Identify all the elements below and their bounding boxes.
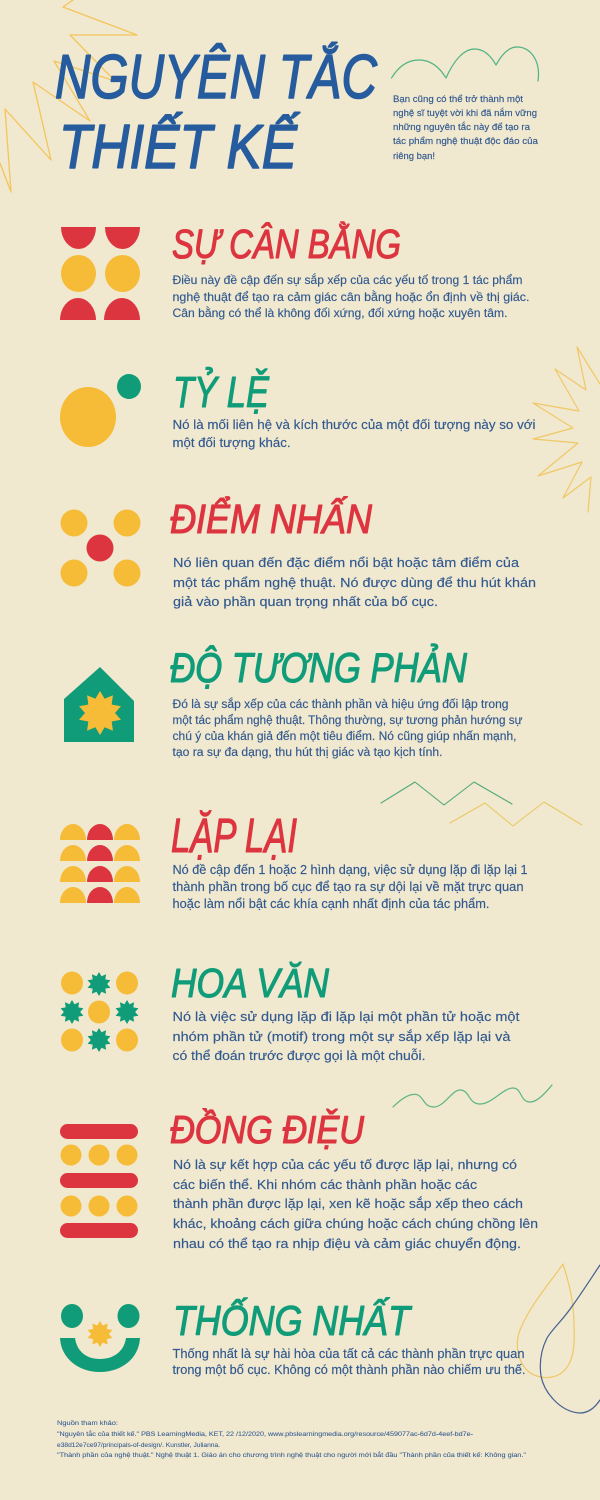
text: pattern: Nó là việc sử dụng lặp đi lặp lại một phần tử hoặc một <box>172 1009 520 1024</box>
text: contrast: Đó là sự sắp xếp của các thành phần và hiệu ứng đối lập trong <box>172 698 508 711</box>
text: pattern: nhóm phần tử (motif) trong một sự sắp xếp lặp lại và <box>172 1029 511 1044</box>
text: repetition <box>172 863 528 911</box>
icon: balance <box>60 227 140 320</box>
intro text: nghệ sĩ tuyệt vời khi đã nắm vững <box>393 108 537 119</box>
text: balance: nghệ thuật để tạo ra cảm giác cân bằng hoặc ổn định về thị giác. <box>172 289 530 304</box>
wave decoration: green <box>393 1085 552 1107</box>
text: unity: Thống nhất là sự hài hòa của tất cả các thành phần trực quan <box>172 1347 525 1361</box>
zigzag decoration: green and gold <box>381 782 582 826</box>
heading: emphasis: ĐIỂM NHẤN <box>170 495 372 542</box>
heading: repetition: LẶP LẠI <box>171 810 297 863</box>
references <box>57 1418 527 1459</box>
text: contrast: tạo ra sự đa dạng, thu hút thị giác và tạo kịch tính. <box>172 747 442 759</box>
panel: proportion <box>60 366 536 450</box>
text: emphasis: Nó liên quan đến đặc điểm nổi bật hoặc tâm điểm của <box>173 555 520 570</box>
arches decoration: green <box>392 47 538 81</box>
panel: repetition <box>60 810 528 911</box>
text: balance: Cân bằng có thể là không đối xứng, đối xứng hoặc xuyên tâm. <box>172 305 508 320</box>
icon: emphasis <box>60 510 140 586</box>
heading: unity: THỐNG NHẤT <box>173 1296 413 1344</box>
references: e38d12e7ce97/principals-of-design/. Kunstler, Julianna. <box>57 1442 220 1449</box>
intro text <box>393 94 539 162</box>
icon: repetition <box>60 824 140 903</box>
text: rhythm <box>173 1157 538 1251</box>
text: proportion: Nó là mối liên hệ và kích thước của một đối tượng này so với <box>172 417 536 432</box>
loop decoration: gold and navy <box>517 1264 600 1413</box>
text: rhythm: nhau có thể tạo ra nhịp điệu và cảm giác chuyển động. <box>173 1236 521 1251</box>
text: pattern <box>172 1009 520 1063</box>
icon: proportion <box>60 374 141 447</box>
panel: unity <box>60 1296 526 1377</box>
icon: unity smile <box>60 1304 140 1372</box>
intro text: tác phẩm nghệ thuật độc đáo của <box>393 136 539 147</box>
text: contrast: chú ý của khán giả đến một tiêu điểm. Nó cũng giúp nhấn mạnh, <box>172 731 516 743</box>
panel: balance <box>60 221 530 320</box>
icon: contrast house <box>64 667 134 742</box>
heading: proportion: TỶ LỆ <box>173 366 270 417</box>
panel: emphasis <box>60 495 536 609</box>
text: proportion <box>172 417 536 450</box>
text: rhythm: Nó là sự kết hợp của các yếu tố được lặp lại, nhưng có <box>173 1157 517 1172</box>
text: unity: trong một bố cục. Không có một thành phần nào chiếm ưu thế. <box>172 1363 526 1377</box>
text: contrast: một tác phẩm nghệ thuật. Thông thường, sự tương phản hướng sự <box>172 715 523 727</box>
text: pattern: có thể đoán trước được gọi là một chuỗi. <box>172 1048 426 1063</box>
panel: rhythm <box>60 1108 538 1251</box>
intro text: Bạn cũng có thể trở thành một <box>393 94 523 105</box>
text: contrast <box>172 698 523 759</box>
text: rhythm: thành phần được lặp lại, xen kẽ hoặc sắp xếp theo cách <box>173 1196 523 1211</box>
text: emphasis: một tác phẩm nghệ thuật. Nó được dùng để thu hút khán <box>173 575 536 590</box>
title: NGUYÊN TẮC <box>55 43 378 112</box>
icon: rhythm <box>60 1124 138 1238</box>
icon: pattern <box>61 972 138 1052</box>
text: balance <box>172 272 530 320</box>
text: repetition: hoặc làm nổi bật các khía cạnh nhất định của tác phẩm. <box>172 897 490 911</box>
text: unity <box>172 1347 526 1377</box>
text: emphasis: giả vào phần quan trọng nhất của bố cục. <box>173 594 438 609</box>
heading: pattern: HOA VĂN <box>171 960 329 1006</box>
panel: pattern <box>61 960 520 1063</box>
heading: rhythm: ĐỒNG ĐIỆU <box>170 1108 365 1152</box>
heading: balance: SỰ CÂN BẰNG <box>172 221 401 267</box>
text: proportion: một đối tượng khác. <box>172 435 290 450</box>
text: rhythm: các biến thể. Khi nhóm các thành phần hoặc các <box>173 1177 478 1192</box>
intro text: những nguyên tắc này để tạo ra <box>393 122 531 133</box>
title: THIẾT KẾ <box>59 113 300 182</box>
references: Nguồn tham khảo: <box>57 1418 118 1427</box>
text: balance: Điều này đề cập đến sự sắp xếp của các yếu tố trong 1 tác phẩm <box>172 272 522 287</box>
references: "Thành phần của nghệ thuật." Nghệ thuật 1. Giáo án cho chương trình nghệ thuật cho người mới bắt đầu "Thành phần của thiết kế: Không gian." <box>57 1450 527 1459</box>
text: emphasis <box>173 555 536 609</box>
text: rhythm: khác, khoảng cách giữa chúng hoặc cách chúng chồng lên <box>173 1216 538 1231</box>
panel: contrast <box>64 643 523 759</box>
title <box>55 43 378 182</box>
references: "Nguyên tắc của thiết kế." PBS LearningMedia, KET, 22 /12/2020, www.pbslearningmedia.org/resource/459077ac-6d7d-4eef-bd7e- <box>57 1429 473 1438</box>
intro text: riêng bạn! <box>393 151 435 162</box>
sunburst decoration: right <box>533 347 600 512</box>
text: repetition: Nó đề cập đến 1 hoặc 2 hình dạng, việc sử dụng lặp đi lặp lại 1 <box>172 863 528 877</box>
text: repetition: thành phần trong bố cục để tạo ra sự dội lại về mặt trực quan <box>172 880 524 894</box>
zigzag decoration: top left <box>0 0 137 192</box>
heading: contrast: ĐỘ TƯƠNG PHẢN <box>170 643 468 691</box>
